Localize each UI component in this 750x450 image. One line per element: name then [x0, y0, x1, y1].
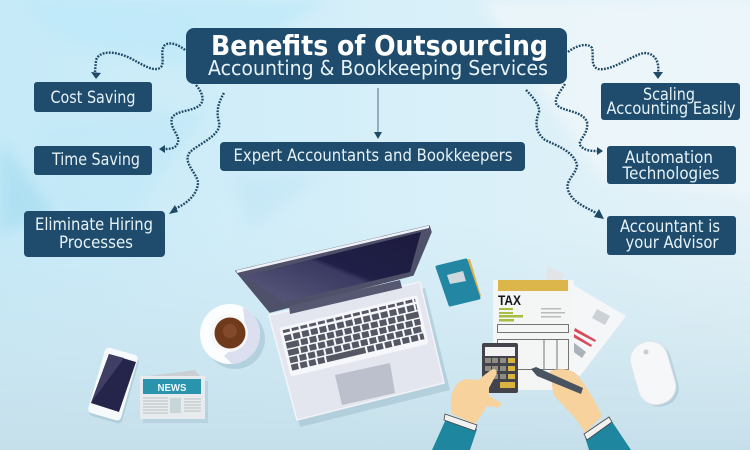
coffee cup	[200, 304, 265, 369]
laptop lid	[236, 226, 431, 312]
arrow: to Scaling Accounting	[568, 45, 663, 79]
box: Automation Technologies	[607, 146, 736, 184]
trackpad	[335, 363, 395, 405]
right hand with sleeve and pen	[531, 367, 631, 450]
box: Scaling Accounting Easily: Scaling	[643, 85, 695, 104]
box: Automation Technologies: Automation	[625, 148, 713, 167]
title subheading: Accounting & Bookkeeping Services	[208, 56, 548, 80]
box: Accountant is your Advisor	[607, 216, 736, 255]
newspaper	[140, 370, 208, 423]
calculator	[482, 343, 518, 393]
box: Accountant is your Advisor: your Advisor	[626, 233, 719, 252]
left hand with sleeve	[432, 369, 501, 450]
notebook	[437, 259, 481, 305]
laptop base	[269, 282, 444, 420]
mouse	[626, 337, 683, 411]
box: Expert Accountants and Bookkeepers	[220, 142, 525, 171]
keyboard	[279, 295, 429, 377]
title panel	[186, 28, 567, 84]
box: Automation Technologies: Technologies	[622, 164, 720, 183]
box: Scaling Accounting Easily: Accounting Easily	[606, 99, 736, 118]
box: Eliminate Hiring Processes: Processes	[59, 233, 133, 252]
box: Scaling Accounting Easily	[601, 83, 740, 120]
laptop	[236, 226, 450, 427]
back paper	[520, 266, 626, 376]
box: Cost Saving	[34, 82, 152, 112]
tax form	[493, 280, 574, 390]
arrow: to Accountant	[526, 90, 604, 219]
box: Time Saving	[34, 146, 152, 175]
newspaper: NEWS	[158, 382, 186, 394]
box: Time Saving: Time Saving	[51, 150, 140, 169]
title heading: Benefits of Outsourcing	[211, 30, 548, 62]
box: Eliminate Hiring Processes: Eliminate Hiring	[35, 215, 153, 234]
arrow: to Eliminate Hiring	[169, 93, 224, 214]
box: Cost Saving: Cost Saving	[50, 88, 136, 107]
arrow: to Automation	[556, 84, 603, 155]
tax form: TAX	[498, 293, 521, 308]
box: Accountant is your Advisor: Accountant is	[620, 217, 720, 236]
arrow: to Expert Accountants	[374, 88, 382, 139]
arrow: to Cost Saving	[91, 43, 185, 79]
arrow: to Time Saving	[159, 85, 203, 153]
box: Expert Accountants and Bookkeepers: Expert Accountants and Bookkeepers	[234, 146, 512, 165]
box: Eliminate Hiring Processes	[24, 211, 165, 257]
phone	[87, 347, 140, 424]
